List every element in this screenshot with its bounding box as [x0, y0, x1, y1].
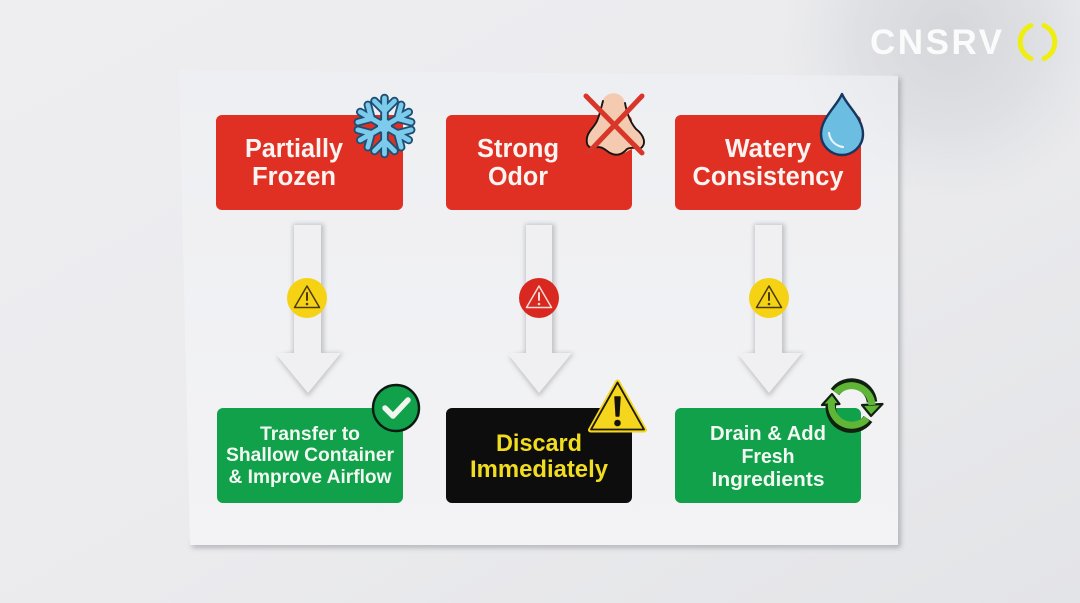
card: Watery Consistency	[675, 115, 861, 210]
paper sheet	[179, 70, 900, 547]
arrow 1	[275, 224, 343, 397]
card: Drain and Add Fresh Ingredients	[675, 408, 861, 503]
icon: water drop	[821, 94, 863, 155]
card: Drain and Add Fresh Ingredients: Fresh	[742, 445, 794, 468]
arrow 2	[507, 224, 574, 397]
arrow 3	[737, 224, 804, 397]
card: Drain and Add Fresh Ingredients: Drain & Add	[710, 422, 826, 445]
logo ring	[1020, 26, 1055, 58]
warning badge 1	[287, 278, 327, 318]
icon: snowflake	[355, 98, 414, 154]
card: Strong Odor	[446, 115, 632, 210]
warning badge 3	[749, 278, 789, 318]
card: Discard Immediately: Discard	[496, 430, 582, 457]
card: Partially Frozen: Frozen	[252, 163, 336, 191]
logo wordmark: CNSRV	[870, 23, 1003, 62]
card: Discard Immediately: Immediately	[470, 456, 608, 483]
card: Strong Odor: Strong	[477, 135, 559, 163]
card: Drain and Add Fresh Ingredients: Ingredients	[712, 468, 824, 491]
icon: green check	[373, 385, 419, 431]
card: Watery Consistency: Consistency	[692, 163, 844, 191]
card: Partially Frozen: Partially	[245, 135, 344, 163]
card: Watery Consistency: Watery	[725, 135, 812, 163]
card: Discard Immediately	[446, 408, 632, 503]
icon: crossed-out nose	[586, 93, 644, 155]
icon: warning triangle	[590, 382, 644, 430]
warning badge 2	[519, 278, 559, 318]
icon: green recycle arrows	[822, 384, 882, 428]
card: Transfer to Shallow Container	[217, 408, 403, 503]
card: Strong Odor: Odor	[488, 163, 548, 191]
card: Partially Frozen	[216, 115, 403, 210]
card: Transfer to Shallow Container: & Improve Airflow	[228, 466, 392, 488]
logo: CNSRV	[870, 23, 1055, 62]
card: Transfer to Shallow Container: Transfer to	[260, 423, 360, 445]
card: Transfer to Shallow Container: Shallow Container	[226, 444, 394, 466]
